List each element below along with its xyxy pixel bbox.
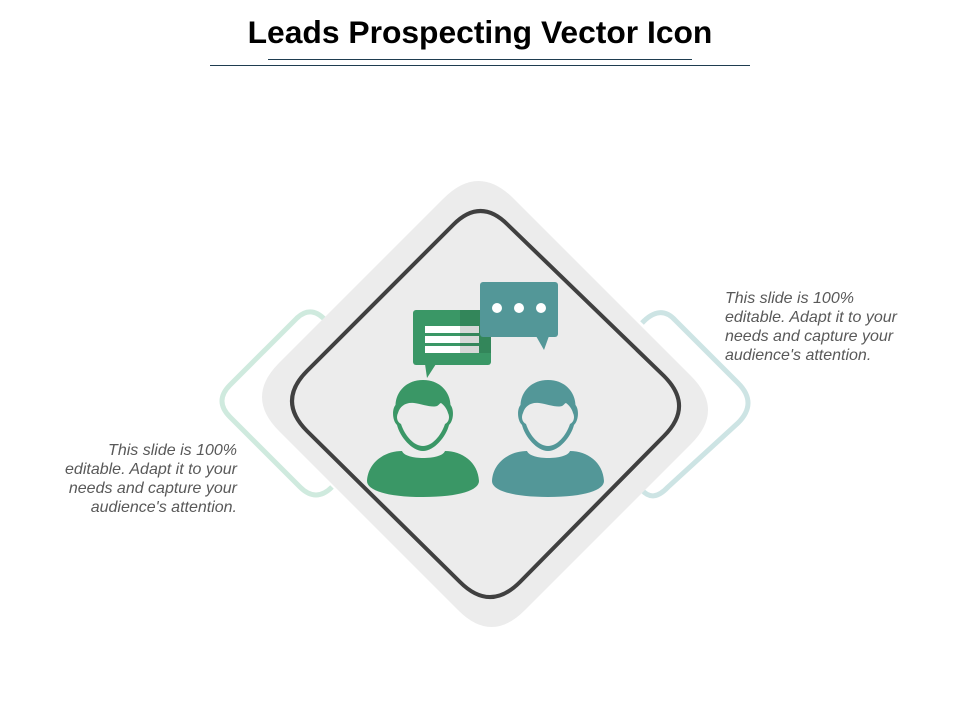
person: green (367, 380, 479, 497)
text block: left note (65, 442, 238, 516)
text block: left note: audience's attention. (91, 499, 237, 516)
text block: right note: needs and capture your (725, 328, 893, 345)
right teal bracket (642, 313, 748, 496)
title: Leads Prospecting Vector Icon (248, 14, 712, 50)
text block: right note: editable. Adapt it to your (725, 309, 897, 326)
text block: right note: audience's attention. (725, 347, 871, 364)
green speech bubble with text lines (413, 310, 491, 378)
grey diamond background (262, 181, 708, 627)
text block: left note: This slide is 100% (108, 442, 237, 459)
teal speech bubble with dots (480, 282, 558, 350)
text block: left note: editable. Adapt it to your (65, 461, 237, 478)
text block: right note: This slide is 100% (725, 290, 854, 307)
text block: left note: needs and capture your (69, 480, 237, 497)
person: teal (492, 380, 604, 497)
text block: right note (725, 290, 898, 364)
dark diamond outline (292, 211, 679, 597)
left mint bracket (222, 312, 332, 495)
